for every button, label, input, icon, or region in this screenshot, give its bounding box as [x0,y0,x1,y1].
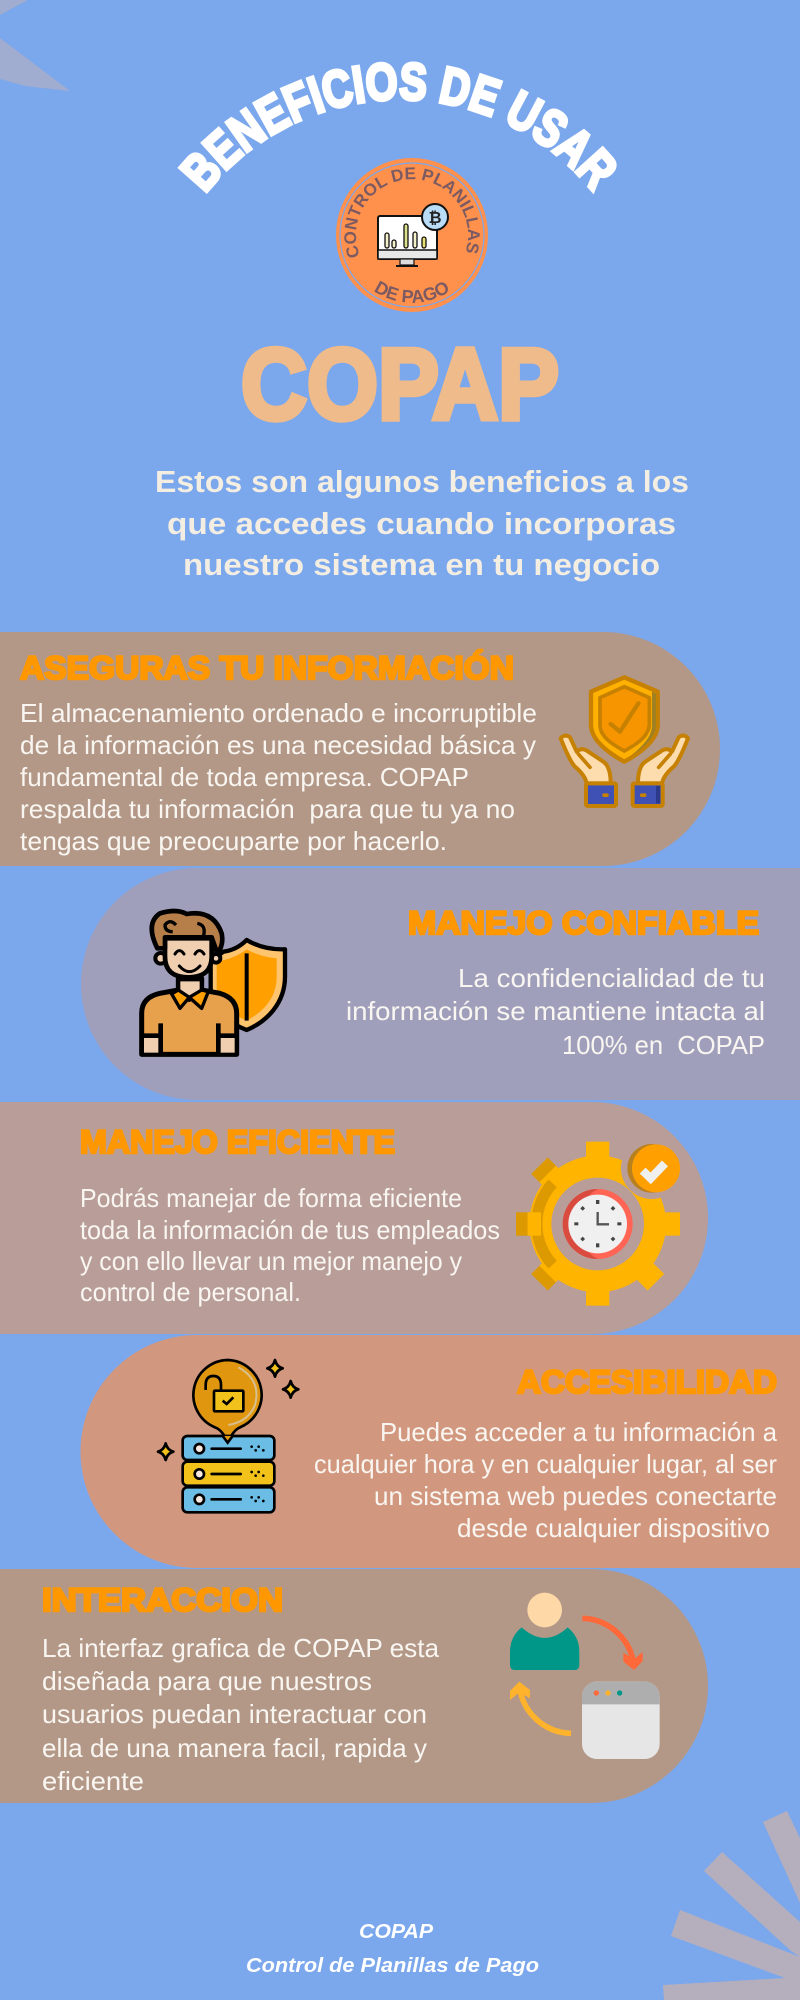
body text: Podrás manejar de forma eficiente [80,1183,462,1213]
icon: user and window cycle [510,1593,660,1759]
logo icon: monitor with chart [378,204,448,267]
icon: gear with clock [516,1138,682,1306]
body text [346,963,765,1060]
body text: información se mantiene intacta al [346,996,765,1026]
decoration: top-left rays [0,0,70,91]
heading: MANEJO CONFIABLE [408,905,759,941]
intro text [155,464,689,582]
footer text: Control de Planillas de Pago [246,1955,539,1977]
body text: un sistema web puedes conectarte [374,1481,777,1511]
intro text: nuestro sistema en tu negocio [183,547,660,582]
logo text: top arc: CONTROL DE PLANILLAS [344,167,480,258]
body text [42,1633,440,1796]
icon: person with shield [142,911,285,1054]
intro text: Estos son algunos beneficios a los [155,464,689,499]
body text: diseñada para que nuestros [42,1666,372,1696]
body text: tengas que preocuparte por hacerlo. [20,826,447,856]
body text: y con ello llevar un mejor manejo y [80,1246,462,1276]
body text: toda la información de tus empleados [80,1215,500,1245]
panel: manejo confiable [81,868,800,1100]
body text [314,1417,778,1543]
body text: usuarios puedan interactuar con [42,1699,427,1729]
icon: server with lock [158,1360,298,1512]
heading: MANEJO EFICIENTE [80,1124,395,1160]
body text: eficiente [42,1766,144,1796]
body text: desde cualquier dispositivo [457,1513,770,1543]
body text [20,698,537,856]
body text: Puedes acceder a tu información a [380,1417,778,1447]
heading: ACCESIBILIDAD [517,1364,777,1400]
logo text: bottom arc: DE PAGO [374,280,448,303]
body text: de la información es una necesidad básica y [20,730,536,760]
logo icon: monitor with chart: ₿ [428,208,442,227]
panel: interaccion [0,1569,708,1803]
panel: accesibilidad [80,1335,800,1568]
body text: El almacenamiento ordenado e incorruptible [20,698,537,728]
heading: ASEGURAS TU INFORMACIÓN [20,650,514,686]
decoration: bottom-right rays [663,1811,800,2000]
body text: respalda tu información para que tu ya no [20,794,515,824]
body text: cualquier hora y en cualquier lugar, al ser [314,1449,777,1479]
intro text: que accedes cuando incorporas [167,506,676,541]
body text: 100% en COPAP [562,1030,765,1060]
heading: INTERACCION [42,1582,283,1618]
body text: La interfaz grafica de COPAP esta [42,1633,440,1663]
body text: control de personal. [80,1277,301,1307]
body text: fundamental de toda empresa. COPAP [20,762,469,792]
panel: aseguras tu informacion [0,632,720,866]
body text [80,1183,500,1307]
brand name: COPAP [241,329,559,441]
icon: shield in hands [561,677,688,806]
logo badge [336,158,488,312]
footer text [246,1921,539,1977]
body text: ella de una manera facil, rapida y [42,1733,427,1763]
body text: La confidencialidad de tu [458,963,765,993]
title: beneficios de usar: BENEFICIOS DE USAR [177,62,617,194]
panel: manejo eficiente [0,1102,708,1334]
footer text: COPAP [359,1921,434,1943]
